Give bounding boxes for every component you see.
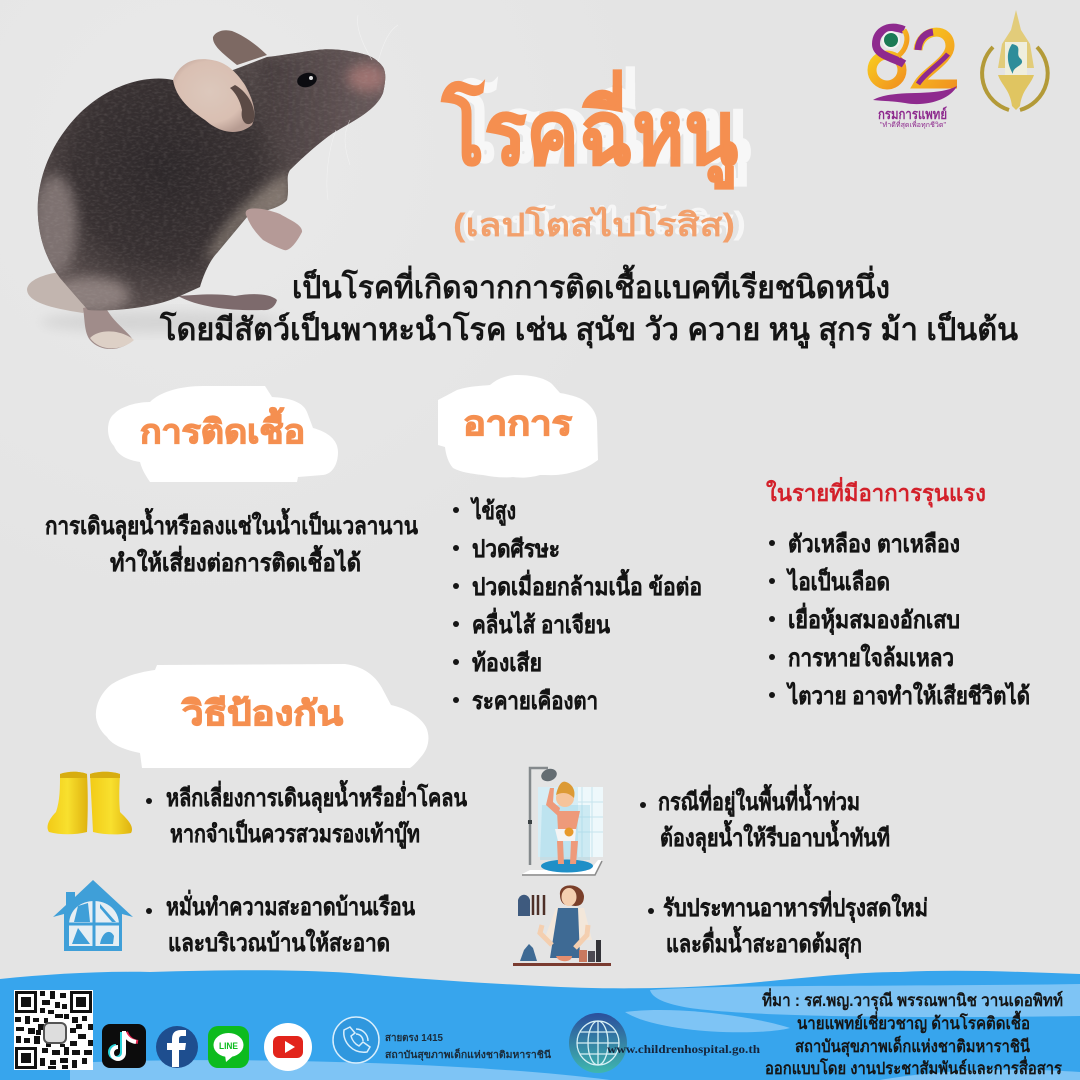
cloud: prevention heading	[96, 664, 428, 768]
icon: person cooking	[513, 885, 611, 966]
severe symptom list: การหายใจล้มเหลว	[788, 643, 954, 672]
heading: symptoms: อาการ	[463, 405, 573, 443]
hotline text	[385, 1033, 551, 1061]
subtitle: (เลปโตสไปโรสิส)	[453, 206, 735, 243]
prevention tip: cooking: และดื่มน้ำสะอาดต้มสุก	[666, 925, 862, 960]
symptom list	[453, 496, 702, 715]
prevention tip: showering: ต้องลุยน้ำให้รีบอาบน้ำทันที	[660, 819, 890, 854]
icon: LINE	[208, 1026, 249, 1068]
prevention tip: cleaning: หมั่นทำความสะอาดบ้านเรือน	[166, 889, 415, 921]
panel: severe cases	[766, 476, 1030, 710]
website: www.childrenhospital.go.th	[607, 1044, 761, 1056]
symptom list: คลื่นไส้ อาเจียน	[472, 607, 611, 639]
icon: YouTube	[264, 1023, 312, 1071]
icon: TikTok	[102, 1024, 146, 1068]
icon: phone hotline	[333, 1017, 379, 1063]
icon: globe	[569, 1013, 627, 1073]
severe symptom list: ไอเป็นเลือด	[785, 567, 890, 596]
prevention tip: showering: กรณีที่อยู่ในพื้นที่น้ำท่วม	[658, 783, 860, 817]
mouse illustration	[20, 15, 400, 349]
prevention tip: cleaning	[146, 889, 415, 957]
panel: infection	[45, 386, 419, 577]
hotline text: สถาบันสุขภาพเด็กแห่งชาติมหาราชินี	[385, 1047, 551, 1061]
panel: footer water band	[0, 970, 1080, 1080]
symptom list: ไข้สูง	[470, 496, 516, 526]
prevention tip: boots: หลีกเลี่ยงการเดินลุยน้ำหรือย่ำโคลน	[166, 779, 467, 814]
logo: Department of Medical Services 82: กรมการแพทย์	[878, 106, 947, 122]
icon: LINE: LINE	[219, 1041, 238, 1051]
prevention tip: cooking	[648, 890, 928, 960]
source credits	[762, 988, 1063, 1078]
title: โรคฉี่หนู	[454, 67, 751, 186]
symptom list: ระคายเคืองตา	[472, 688, 598, 715]
prevention tip: boots	[146, 779, 467, 849]
infection text: การเดินลุยน้ำหรือลงแช่ในน้ำเป็นเวลานาน	[45, 507, 419, 542]
source credits: สถาบันสุขภาพเด็กแห่งชาติมหาราชินี	[795, 1034, 1030, 1057]
severe symptom list	[769, 531, 1030, 710]
prevention tip: showering	[640, 783, 890, 854]
icon: child showering	[522, 767, 603, 875]
hotline text: สายตรง 1415	[385, 1033, 443, 1044]
intro text: เป็นโรคที่เกิดจากการติดเชื้อแบคทีเรียชนิดหนึ่ง	[292, 264, 890, 305]
infection text	[45, 507, 419, 577]
logo: Department of Medical Services 82	[872, 28, 957, 129]
intro text: โดยมีสัตว์เป็นพาหะนำโรค เช่น สุนัข วัว ควาย หนู สุกร ม้า เป็นต้น	[159, 310, 1018, 349]
qr code	[14, 990, 93, 1070]
subtitle: (เลปโตสไปโรสิส)	[462, 204, 746, 241]
prevention tip: boots: หากจำเป็นควรสวมรองเท้าบู๊ท	[170, 819, 420, 849]
logo: Department of Medical Services 82: "ทำดีที่สุดเพื่อทุกชีวิต"	[880, 120, 947, 129]
heading: severe cases: ในรายที่มีอาการรุนแรง	[766, 476, 986, 508]
symptom list: ปวดศีรษะ	[472, 536, 560, 563]
severe symptom list: เยื่อหุ้มสมองอักเสบ	[788, 602, 960, 636]
symptom list: ปวดเมื่อยกล้ามเนื้อ ข้อต่อ	[472, 568, 702, 601]
severe symptom list: ไตวาย อาจทำให้เสียชีวิตได้	[785, 681, 1030, 710]
title: โรคฉี่หนู	[441, 70, 738, 189]
logo: Queen Sirikit institute seal	[982, 10, 1048, 110]
cloud: infection heading	[108, 386, 338, 482]
icon: rubber boots	[48, 772, 132, 834]
severe symptom list: ตัวเหลือง ตาเหลือง	[788, 531, 960, 558]
source credits: นายแพทย์เชี่ยวชาญ ด้านโรคติดเชื้อ	[797, 1010, 1030, 1034]
heading: prevention: วิธีป้องกัน	[181, 695, 343, 733]
cloud: symptoms heading	[438, 375, 598, 478]
infection text: ทำให้เสี่ยงต่อการติดเชื้อได้	[110, 544, 361, 577]
symptom list: ท้องเสีย	[472, 650, 542, 677]
panel: prevention	[48, 664, 928, 966]
panel: symptoms	[438, 375, 702, 715]
intro text	[159, 264, 1018, 349]
icon: Facebook	[156, 1026, 198, 1068]
prevention tip: cooking: รับประทานอาหารที่ปรุงสดใหม่	[663, 890, 928, 924]
heading: infection: การติดเชื้อ	[140, 407, 305, 450]
prevention tip: cleaning: และบริเวณบ้านให้สะอาด	[168, 928, 390, 957]
icon: house cleaning	[53, 880, 133, 951]
